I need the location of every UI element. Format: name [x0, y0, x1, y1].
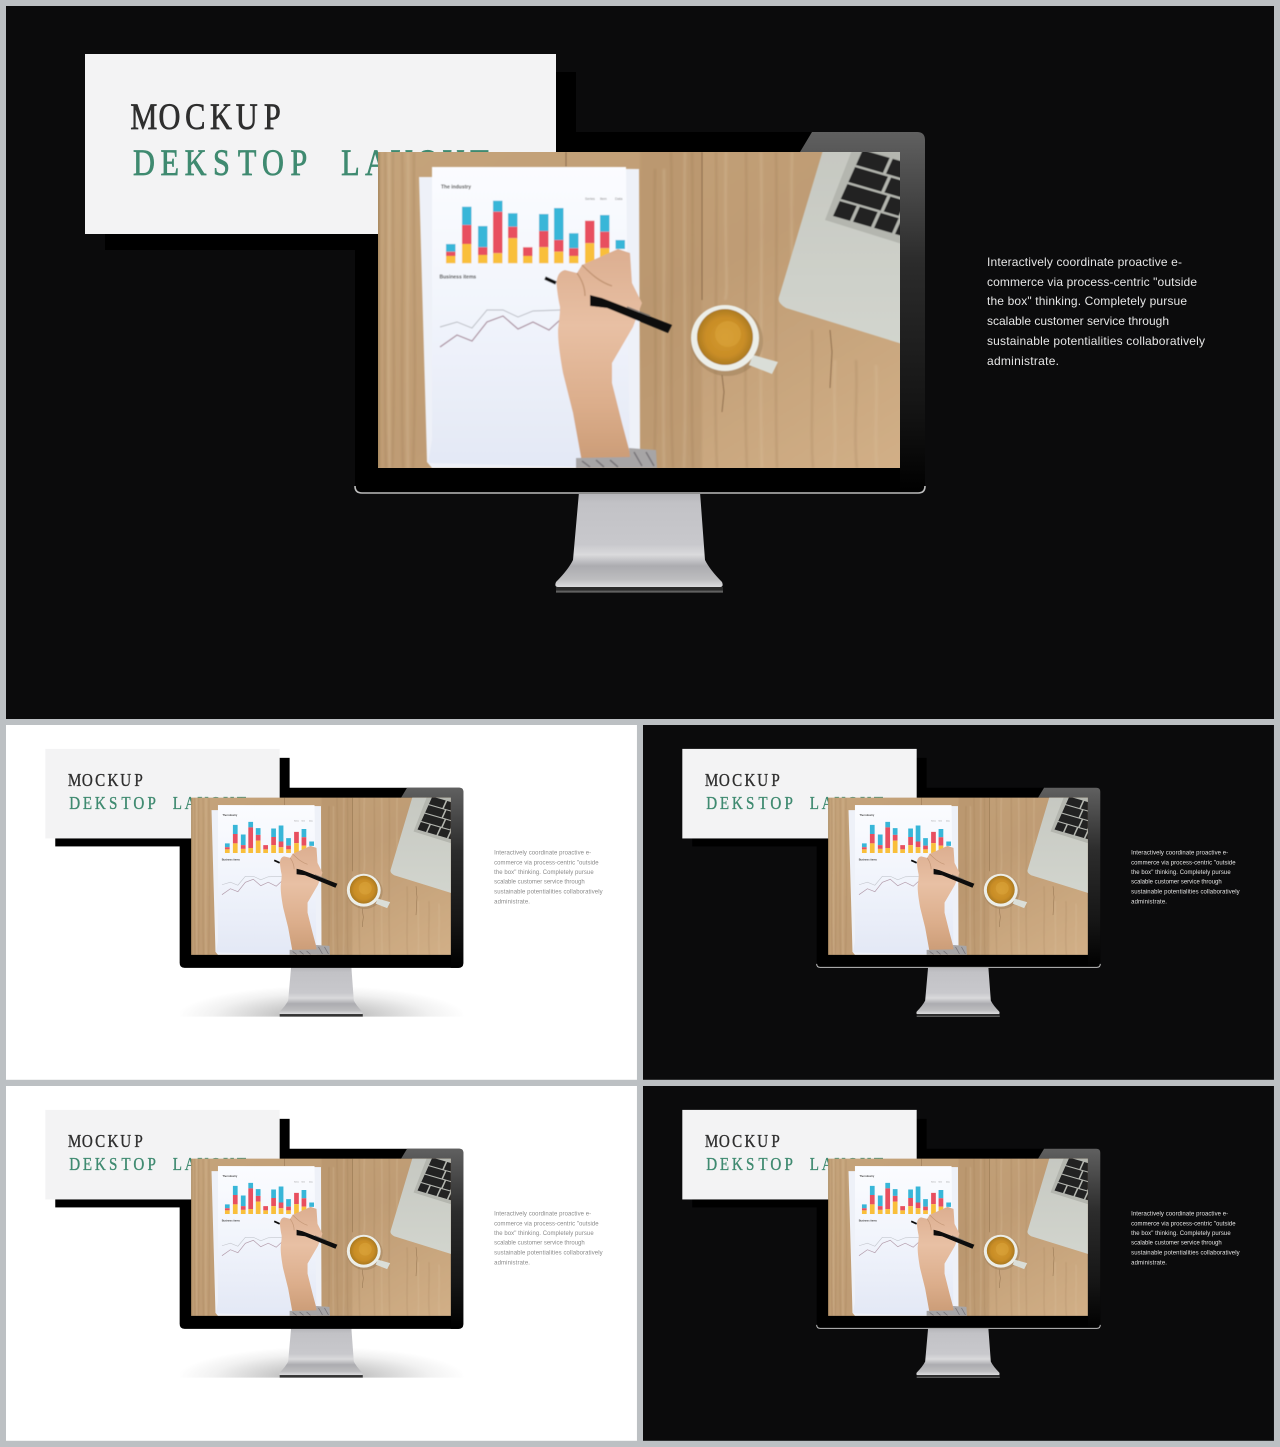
- body text: the box" thinking. Completely pursue: [1131, 870, 1231, 876]
- title: DEKSTOP LAYOUT: [69, 793, 246, 813]
- monitor screen photo: [824, 1155, 1109, 1319]
- body text: administrate.: [987, 354, 1059, 368]
- panel: small light slide top left: [6, 725, 637, 1080]
- body text: the box" thinking. Completely pursue: [1131, 1231, 1231, 1237]
- title box: [85, 54, 556, 234]
- body text: commerce via process-centric "outside: [494, 1221, 599, 1227]
- title box offset shadow: [105, 72, 576, 250]
- body text: [1131, 1211, 1240, 1267]
- body text: the box" thinking. Completely pursue: [494, 870, 594, 876]
- title: [705, 1131, 883, 1174]
- monitor screen photo: [824, 794, 1109, 958]
- body text: administrate.: [494, 1261, 530, 1267]
- title: [68, 770, 246, 813]
- monitor body and stand: [180, 788, 463, 1017]
- body text: administrate.: [1131, 1261, 1167, 1267]
- body text: sustainable potentialities collaboratively: [494, 890, 603, 896]
- monitor screen photo: [370, 145, 943, 475]
- body text: Interactively coordinate proactive e-: [1131, 850, 1228, 856]
- title box offset shadow: [55, 758, 290, 846]
- title: MOCKUP: [68, 770, 143, 791]
- title box: [45, 749, 280, 838]
- body text: [1131, 850, 1240, 906]
- body text: Interactively coordinate proactive e-: [494, 1211, 591, 1217]
- body text: the box" thinking. Completely pursue: [494, 1231, 594, 1237]
- panel: small light slide bottom left: [6, 1086, 637, 1441]
- title box: [682, 1110, 917, 1199]
- monitor bottom highlight: [817, 1325, 1100, 1328]
- monitor body and stand: [817, 788, 1100, 1017]
- title: DEKSTOP LAYOUT: [133, 143, 489, 184]
- panel: large dark slide: [6, 6, 1274, 719]
- title box offset shadow: [692, 758, 927, 846]
- body text: Interactively coordinate proactive e-: [987, 255, 1182, 269]
- monitor screen photo: [187, 794, 472, 958]
- title box: [45, 1110, 280, 1199]
- monitor bottom highlight: [355, 486, 925, 493]
- body text: commerce via process-centric "outside: [987, 275, 1197, 289]
- monitor body and stand: [817, 1149, 1100, 1378]
- title box: [682, 749, 917, 838]
- floor shadow: [198, 991, 444, 1017]
- body text: scalable customer service through: [494, 1241, 585, 1247]
- body text: commerce via process-centric "outside: [1131, 860, 1236, 866]
- body text: [494, 850, 603, 906]
- monitor body and stand: [355, 132, 925, 592]
- body text: [987, 255, 1205, 368]
- body text: sustainable potentialities collaboratively: [987, 334, 1205, 348]
- body text: commerce via process-centric "outside: [494, 860, 599, 866]
- body text: commerce via process-centric "outside: [1131, 1221, 1236, 1227]
- title: MOCKUP: [130, 97, 281, 138]
- body text: scalable customer service through: [987, 314, 1169, 328]
- title: [130, 97, 489, 184]
- title: DEKSTOP LAYOUT: [706, 793, 883, 813]
- title box offset shadow: [692, 1119, 927, 1207]
- floor shadow: [198, 1352, 444, 1378]
- body text: scalable customer service through: [494, 880, 585, 886]
- monitor screen photo: [187, 1155, 472, 1319]
- panel: small dark slide top right: [643, 725, 1274, 1080]
- body text: administrate.: [1131, 900, 1167, 906]
- title box offset shadow: [55, 1119, 290, 1207]
- body text: Interactively coordinate proactive e-: [1131, 1211, 1228, 1217]
- title: [705, 770, 883, 813]
- monitor bottom highlight: [817, 964, 1100, 967]
- body text: administrate.: [494, 900, 530, 906]
- title: MOCKUP: [705, 1131, 780, 1152]
- title: [68, 1131, 246, 1174]
- body text: sustainable potentialities collaboratively: [494, 1251, 603, 1257]
- title: MOCKUP: [68, 1131, 143, 1152]
- monitor body and stand: [180, 1149, 463, 1378]
- panel: small dark slide bottom right: [643, 1086, 1274, 1441]
- body text: scalable customer service through: [1131, 1241, 1222, 1247]
- body text: sustainable potentialities collaboratively: [1131, 1251, 1240, 1257]
- title: DEKSTOP LAYOUT: [706, 1154, 883, 1174]
- title: DEKSTOP LAYOUT: [69, 1154, 246, 1174]
- body text: [494, 1211, 603, 1267]
- body text: Interactively coordinate proactive e-: [494, 850, 591, 856]
- body text: the box" thinking. Completely pursue: [987, 294, 1187, 308]
- body text: sustainable potentialities collaboratively: [1131, 890, 1240, 896]
- title: MOCKUP: [705, 770, 780, 791]
- body text: scalable customer service through: [1131, 880, 1222, 886]
